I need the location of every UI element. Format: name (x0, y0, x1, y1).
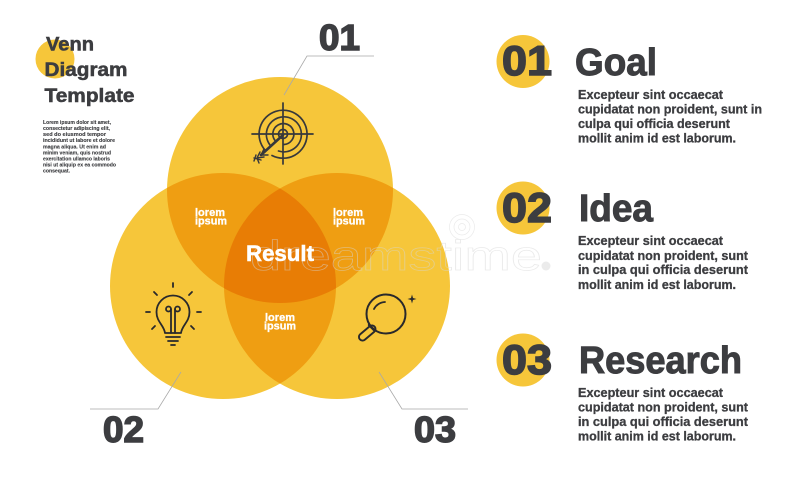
text: goal (578, 88, 762, 146)
text: idea: mollit anim id est laborum. (578, 278, 736, 292)
title block: Template (44, 85, 135, 107)
icon: magnifying glass (362, 294, 416, 337)
text: research: cupidatat non proident, sunt (578, 400, 749, 414)
label: lorem ipsum left: ipsum (195, 216, 227, 228)
text: idea (578, 234, 749, 292)
callout line 03 (379, 372, 468, 409)
text: goal: Excepteur sint occaecat (578, 88, 724, 102)
text: research (578, 386, 749, 444)
icon: light bulb (146, 283, 201, 345)
overlap: result (224, 188, 336, 303)
title block (36, 34, 135, 107)
label: result: Result (246, 241, 315, 266)
intro text block: nisi ut aliquip ex ea commodo (43, 162, 117, 168)
label: lorem ipsum bottom (264, 312, 296, 332)
text: idea: in culpa qui officia deserunt (578, 263, 749, 277)
text: research: in culpa qui officia deserunt (578, 415, 749, 429)
circle: goal (167, 77, 393, 303)
label: lorem ipsum left: lorem (195, 207, 225, 219)
intro text block: magna aliqua. Ut enim ad (43, 144, 107, 150)
label: lorem ipsum right (333, 207, 365, 228)
intro text block (43, 120, 117, 174)
intro text block: incididunt ut labore et dolore (43, 138, 115, 144)
text: idea: Excepteur sint occaecat (578, 234, 724, 248)
intro text block: consectetur adipiscing elit, (43, 126, 110, 132)
heading: research: Research (579, 340, 742, 382)
watermark: dreamstime (250, 232, 542, 279)
label: lorem ipsum bottom: ipsum (264, 320, 296, 332)
overlap: goal and idea (167, 173, 280, 288)
text: goal: culpa qui officia deserunt (578, 117, 731, 131)
section: idea (496, 182, 749, 292)
text: goal: cupidatat non proident, sunt in (578, 102, 762, 116)
circle: idea (110, 173, 336, 399)
callout line 01 (284, 56, 374, 95)
heading: idea: Idea (579, 188, 654, 230)
venn diagram (110, 77, 450, 399)
number 03: 03 (414, 409, 456, 450)
watermark (250, 214, 550, 279)
overlap: goal and research (280, 173, 393, 288)
intro text block: Lorem ipsum dolor sit amet, (43, 120, 111, 126)
intro text block: consequat. (43, 168, 70, 174)
badge 01: 01 (502, 37, 552, 84)
heading: goal: Goal (575, 42, 657, 84)
label: lorem ipsum bottom: lorem (265, 312, 295, 324)
callout line 02 (90, 372, 181, 409)
intro text block: minim veniam, quis nostrud (43, 150, 112, 156)
intro text block: exercitation ullamco laboris (43, 156, 110, 162)
label: lorem ipsum left (195, 207, 227, 228)
text: goal: mollit anim id est laborum. (578, 132, 736, 146)
title block: Venn (46, 34, 94, 56)
number 02: 02 (103, 409, 144, 450)
section: goal (496, 35, 762, 146)
section: research (496, 334, 749, 444)
label: lorem ipsum right: lorem (333, 207, 363, 219)
title block: Diagram (44, 59, 127, 81)
text: research: Excepteur sint occaecat (578, 386, 724, 400)
label: lorem ipsum right: ipsum (333, 216, 365, 228)
number 01: 01 (319, 17, 360, 58)
circle: research (224, 173, 450, 399)
text: idea: cupidatat non proident, sunt (578, 249, 749, 263)
icon: target with arrow (252, 103, 313, 164)
intro text block: sed do eiusmod tempor (43, 132, 107, 138)
badge 03: 03 (502, 336, 552, 383)
text: research: mollit anim id est laborum. (578, 430, 736, 444)
badge 02: 02 (502, 184, 552, 231)
overlap: idea and research (224, 288, 336, 384)
